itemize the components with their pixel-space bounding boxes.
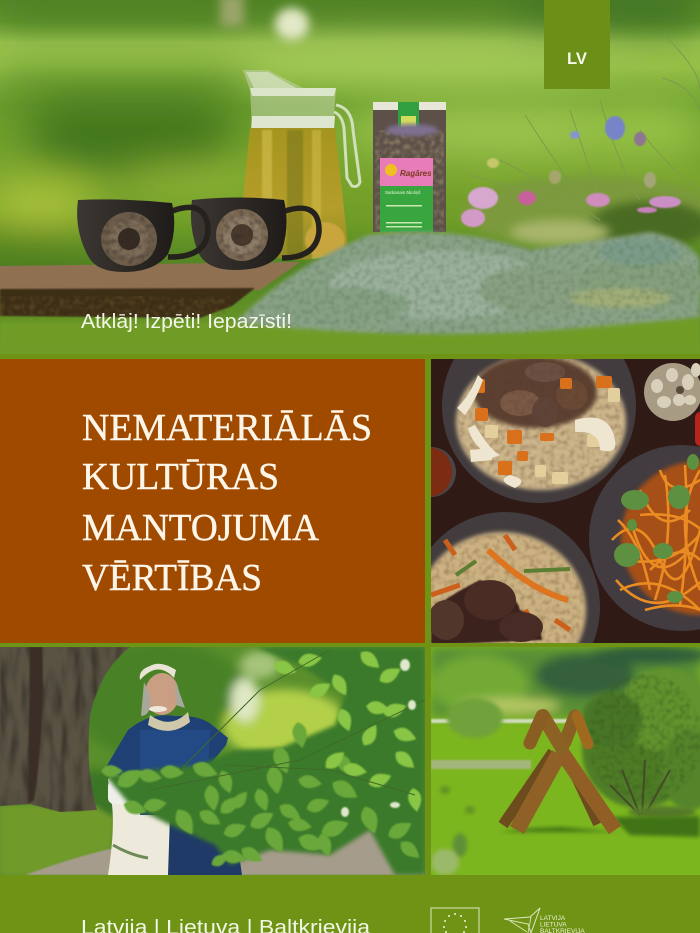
- grass: [0, 805, 115, 875]
- wooden table slab: [0, 262, 300, 318]
- background trees: [431, 645, 700, 717]
- photo: woman in traditional costume under a tree: [0, 640, 425, 875]
- food photo: bowls of traditional dishes: [431, 359, 700, 643]
- wooden sculpture: [503, 716, 615, 830]
- foreground grass: [2, 315, 700, 338]
- glass jug with herbal tea: [239, 70, 360, 260]
- pale path stripes: [431, 719, 571, 769]
- programme name: LIETUVA: [540, 922, 567, 928]
- hero photo: tea still life in a garden: [0, 0, 700, 354]
- title panel: [0, 359, 425, 643]
- main title: VĒRTĪBAS: [82, 557, 262, 599]
- small red sauce bowl: [431, 447, 456, 497]
- red chili: [695, 412, 700, 446]
- herbal tea package: Ragāres: [400, 169, 432, 178]
- shrubs: [447, 668, 700, 818]
- garlic bulb: [644, 363, 700, 421]
- programme name: LATVIJA: [540, 915, 566, 922]
- icon: programme logo: [504, 908, 540, 933]
- language badge: LV: [567, 49, 588, 68]
- main title: [82, 407, 372, 599]
- silver wormwood shrub: [228, 232, 700, 336]
- main title: KULTŪRAS: [82, 456, 279, 498]
- green divider frames: [0, 354, 700, 875]
- tagline: Atklāj! Izpēti! Iepazīsti!: [81, 311, 292, 333]
- blurred background trunk and spot: [220, 0, 309, 40]
- tree trunk: [0, 647, 130, 812]
- main title: MANTOJUMA: [82, 507, 320, 549]
- spiced carrot salad bowl: [589, 445, 700, 631]
- ground shadow: [500, 816, 700, 837]
- footer: countries and logos: [0, 875, 700, 933]
- rice and meat bowl: [431, 512, 600, 643]
- linden branch with leaves: [101, 647, 425, 875]
- herbal tea package: [373, 102, 446, 232]
- icon: EU flag: [431, 908, 479, 933]
- herbal tea package: Sarkanais āboliņš: [385, 190, 421, 195]
- language badge: [544, 0, 610, 89]
- ceramic mug left: [77, 199, 208, 272]
- programme name: [540, 915, 585, 933]
- noodle and meat bowl: [442, 359, 636, 503]
- gravel path: [25, 825, 425, 875]
- main title: NEMATERIĀLĀS: [82, 407, 372, 449]
- woman figure: [106, 664, 242, 875]
- ceramic mug right: [191, 198, 319, 270]
- photo: wooden sculpture in a park: [431, 645, 700, 875]
- wildflower bouquet: [460, 35, 700, 249]
- blurred foreground leaves: [431, 786, 475, 875]
